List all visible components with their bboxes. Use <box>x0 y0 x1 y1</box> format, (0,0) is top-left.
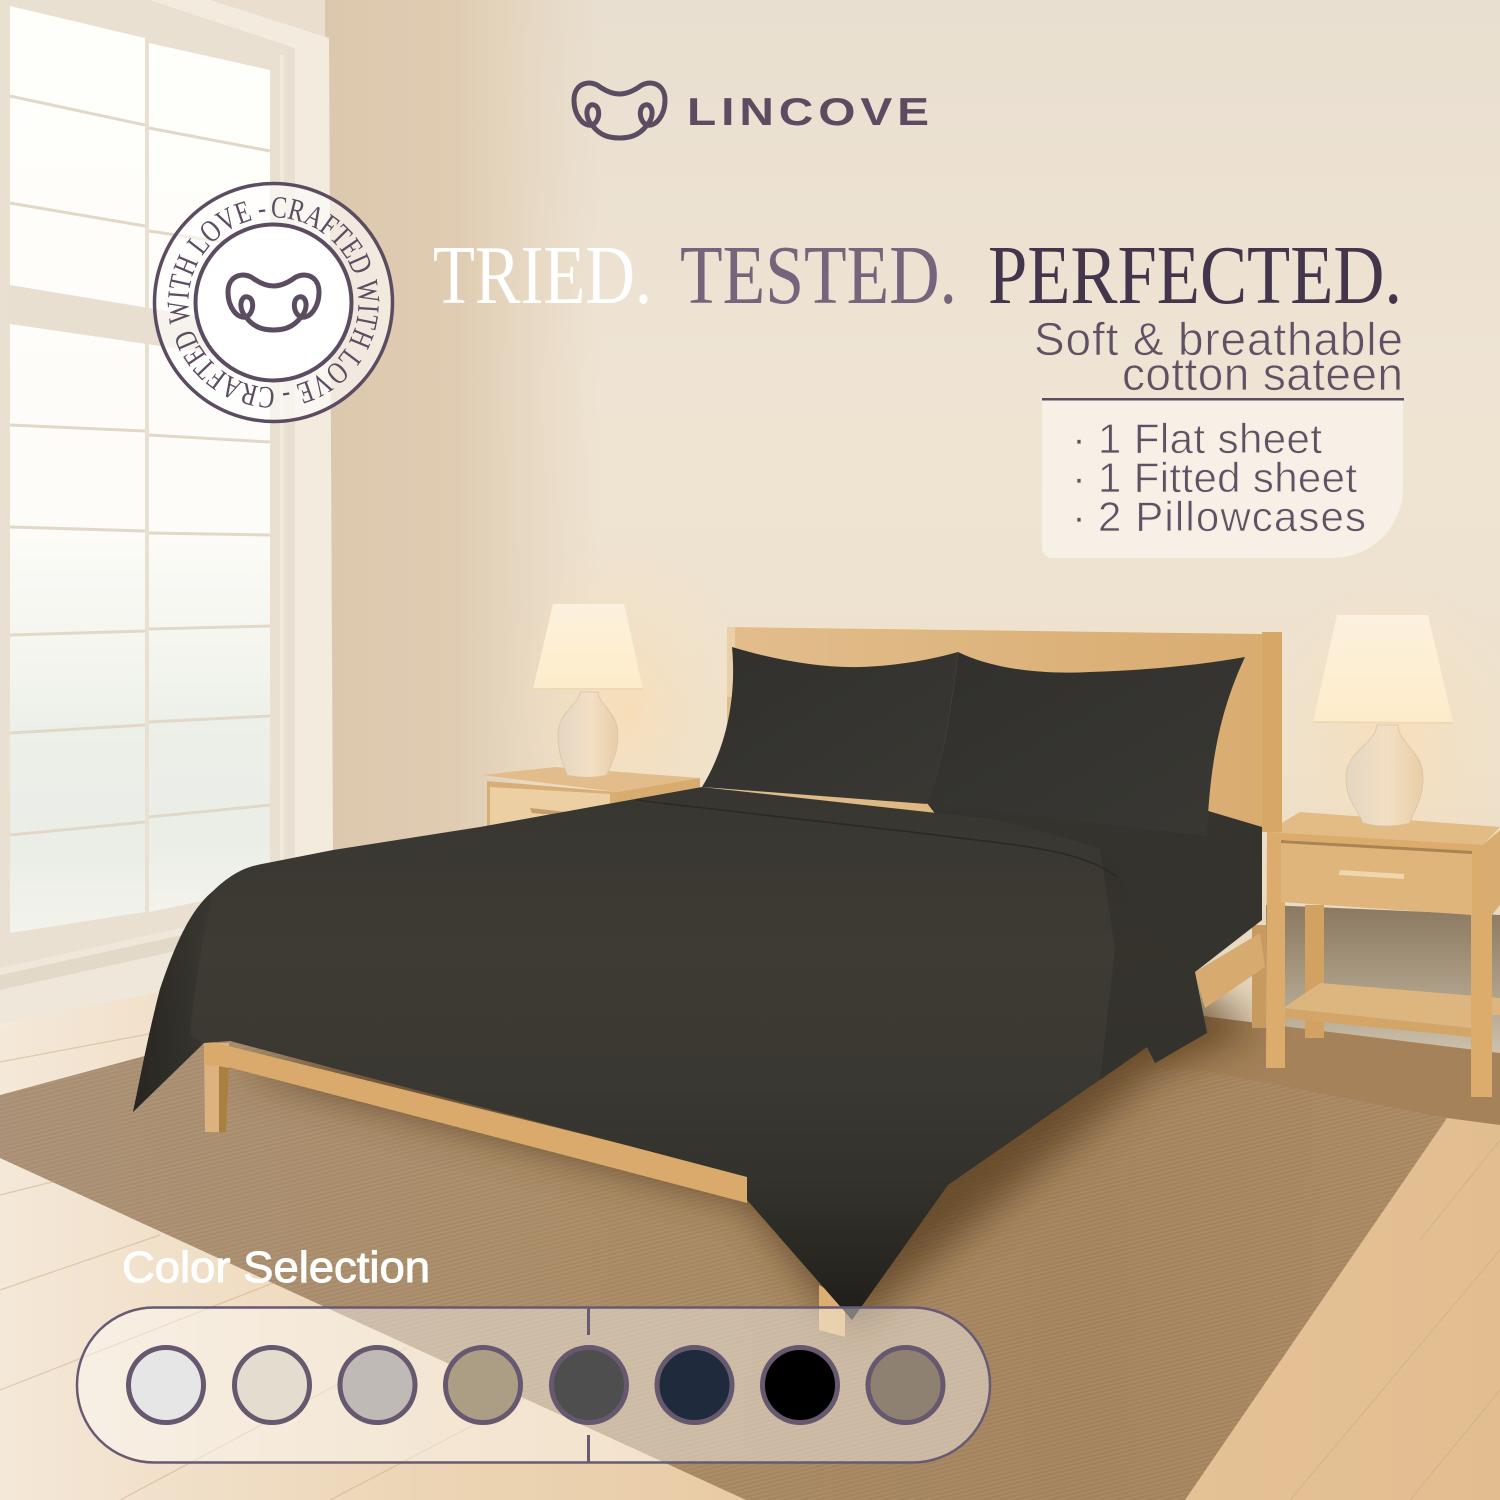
window <box>0 0 333 1030</box>
item 3 label: 2 Pillowcases <box>1098 493 1366 540</box>
window sill <box>0 915 235 1024</box>
headboard panel <box>727 627 1262 840</box>
bed <box>133 627 1282 1337</box>
logo <box>574 83 934 138</box>
badge circular text: CRAFTED WITH LOVE - CRAFTED WITH LOVE - <box>168 197 380 408</box>
drawer <box>490 787 610 830</box>
thick window rail <box>10 285 270 362</box>
glass right column <box>149 43 270 912</box>
sill front <box>0 925 235 990</box>
item 2 label: 1 Fitted sheet <box>1098 454 1357 501</box>
color selection heading: Color Selection <box>122 1243 430 1292</box>
drawer front <box>1281 843 1472 915</box>
bar pill <box>77 1308 990 1462</box>
floor <box>0 955 1500 1500</box>
top fold <box>636 800 1117 877</box>
shade rim <box>1313 721 1453 724</box>
headline word 1: TRIED. <box>433 229 652 322</box>
rug texture <box>0 1040 1447 1500</box>
lamp shade <box>533 604 643 689</box>
shelf front <box>1282 1008 1471 1037</box>
swatches <box>128 1348 943 1422</box>
badge outer ring <box>154 184 392 422</box>
leg side <box>219 1066 229 1132</box>
logo wordmark: LINCOVE <box>687 91 934 134</box>
headline <box>433 229 1402 322</box>
lamp base <box>1346 725 1423 826</box>
swatch black <box>762 1348 838 1422</box>
swatch white <box>128 1348 204 1422</box>
left nightstand <box>482 767 700 830</box>
headboard right post <box>1262 632 1282 832</box>
sheet right drop <box>1100 848 1207 1080</box>
subtitle line 1: Soft & breathable <box>1034 313 1403 365</box>
item 1 label: 1 Flat sheet <box>1098 415 1322 462</box>
item 3: · <box>1072 493 1086 540</box>
swatch khaki <box>446 1348 520 1422</box>
side panel <box>1485 830 1500 915</box>
item 2: · <box>1072 454 1086 501</box>
headboard left edge <box>727 627 735 697</box>
drawer handle <box>1339 870 1404 879</box>
lamp glow on wall, left <box>495 540 755 880</box>
contents panel <box>1042 398 1404 558</box>
flat sheet <box>133 787 1207 1320</box>
subtitle line 2: cotton sateen <box>1122 348 1403 400</box>
right frame highlight <box>280 55 284 895</box>
floor shadow by right nightstand <box>1080 990 1500 1125</box>
subtitle <box>1034 313 1403 400</box>
swatch ivory <box>234 1348 310 1422</box>
left lamp <box>533 604 643 777</box>
right lamp <box>1313 615 1453 826</box>
shelf top <box>1282 983 1500 1028</box>
swatch silver <box>340 1348 415 1422</box>
headline word 3: PERFECTED. <box>988 229 1402 322</box>
side wall <box>325 0 490 1000</box>
drawer shadow <box>1281 840 1472 855</box>
wall corner soft shade <box>485 0 600 1000</box>
rear post leg <box>1252 925 1266 1028</box>
badge inner circle <box>196 224 352 380</box>
swatch taupe <box>868 1348 943 1422</box>
side rail <box>1195 933 1265 1008</box>
front leg left <box>204 1043 229 1132</box>
shade rim <box>533 688 643 690</box>
lamp base <box>558 692 618 777</box>
sheet left drop <box>133 891 213 1112</box>
lamp glow on wall, right <box>1250 580 1500 920</box>
glass left column <box>10 6 145 933</box>
body <box>1266 830 1492 1097</box>
window frame <box>0 0 295 968</box>
lamp shade <box>1313 615 1453 723</box>
wall shade behind right nightstand <box>1266 905 1500 1060</box>
badge icon <box>228 275 319 330</box>
back wall <box>480 0 1500 1100</box>
divider ticks <box>587 1307 590 1462</box>
foot leg <box>819 1285 845 1337</box>
left pillow <box>702 647 958 804</box>
rug <box>0 960 1447 1500</box>
panel rule <box>1042 398 1404 400</box>
rug surface <box>0 1040 1447 1500</box>
floor plank lines <box>0 1030 1500 1500</box>
swatch navy <box>657 1348 732 1422</box>
swatch charcoal <box>552 1348 626 1422</box>
back leg <box>1305 905 1324 1038</box>
handle <box>530 808 566 816</box>
front <box>487 781 617 830</box>
item 1: · <box>1072 415 1086 462</box>
side <box>617 778 700 812</box>
window bars <box>10 96 270 835</box>
right nightstand <box>1266 812 1500 1097</box>
logo icon <box>574 83 665 138</box>
window reveal <box>0 0 333 1030</box>
fitted sheet side <box>927 803 1262 1020</box>
badge <box>152 182 394 424</box>
top <box>482 767 700 792</box>
list items <box>1072 415 1366 540</box>
top <box>1267 812 1500 845</box>
color selection bar <box>77 1307 990 1462</box>
right pillow <box>927 652 1245 836</box>
shadow under bed <box>228 960 1260 1330</box>
front rail <box>204 1040 747 1203</box>
headline word 2: TESTED. <box>680 229 957 322</box>
panel background <box>1042 400 1403 558</box>
